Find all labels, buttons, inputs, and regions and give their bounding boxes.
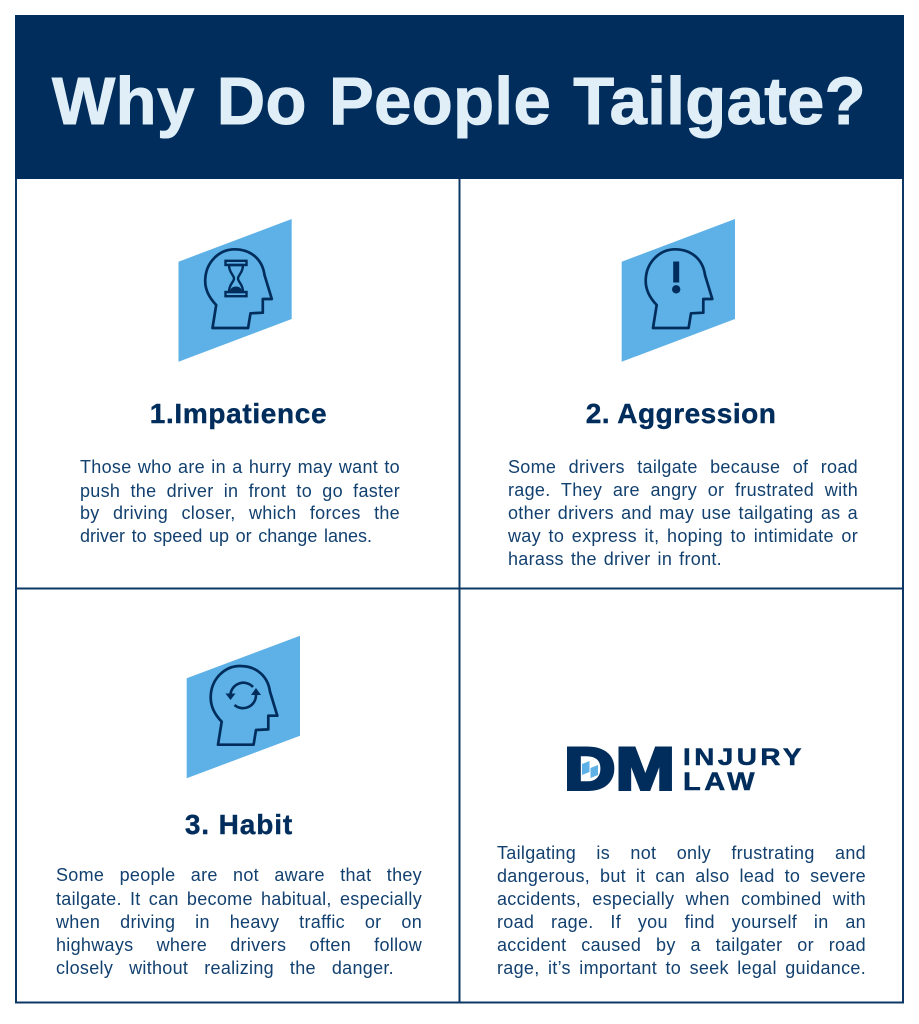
heading: aggression: 2. Aggression <box>586 398 776 429</box>
text: habit <box>56 865 422 978</box>
title banner <box>15 15 904 179</box>
text: habit: Some people are not aware that they <box>56 865 422 885</box>
text: aggression <box>508 457 858 569</box>
text: closing message: road rage. If you find yourself in an <box>497 912 866 932</box>
text: habit: closely without realizing the danger. <box>56 958 394 978</box>
text: impatience: by driving closer, which forces the <box>80 503 400 523</box>
text: impatience <box>80 457 400 546</box>
text: habit: tailgate. It can become habitual, especially <box>56 889 422 909</box>
text: impatience: Those who are in a hurry may want to <box>80 457 400 477</box>
heading: impatience: 1.Impatience <box>150 398 327 429</box>
text: aggression: harass the driver in front. <box>508 549 722 569</box>
text: closing message <box>497 843 866 978</box>
text: habit: highways where drivers often follow <box>56 935 422 955</box>
text: aggression: Some drivers tailgate because of road <box>508 457 858 477</box>
icon: head with hourglass <box>178 219 292 362</box>
text: closing message: accidents, especially when combined with <box>497 889 866 909</box>
icon: head with cycle arrows <box>186 636 300 778</box>
text: closing message: rage, it’s important to seek legal guidance. <box>497 958 866 978</box>
text: aggression: way to express it, hoping to intimidate or <box>508 526 858 546</box>
logo: DM Injury Law: INJURY <box>683 744 805 771</box>
title banner: Why Do People Tailgate? <box>52 64 866 139</box>
text: closing message: accident caused by a tailgater or road <box>497 935 866 955</box>
text: impatience: push the driver in front to go faster <box>80 481 400 501</box>
logo: DM Injury Law <box>564 736 805 800</box>
heading: habit: 3. Habit <box>185 809 293 840</box>
logo: DM Injury Law: LAW <box>683 768 758 796</box>
text: impatience: driver to speed up or change lanes. <box>80 526 372 546</box>
icon: head with exclamation mark <box>622 219 735 362</box>
text: closing message: Tailgating is not only frustrating and <box>497 843 866 863</box>
text: aggression: other drivers and may use tailgating as a <box>508 503 858 523</box>
text: closing message: dangerous, but it can also lead to severe <box>497 866 866 886</box>
text: habit: when driving in heavy traffic or on <box>56 912 422 932</box>
text: aggression: rage. They are angry or frustrated with <box>508 480 858 500</box>
